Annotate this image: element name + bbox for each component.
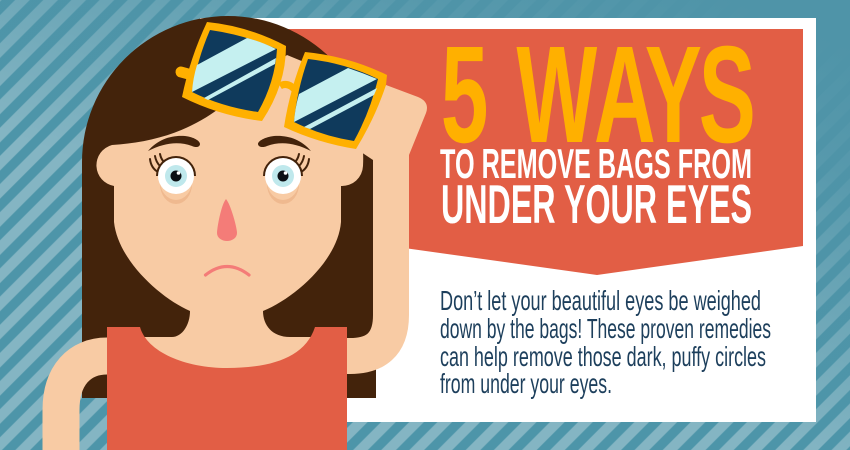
eyebrows — [148, 136, 311, 151]
left eye — [150, 154, 194, 194]
right lens — [294, 59, 378, 141]
character: woman lifting sunglasses — [61, 16, 427, 450]
sunglasses — [181, 22, 387, 149]
under-eye bags — [160, 162, 299, 204]
left arm — [61, 356, 120, 450]
intro paragraph — [440, 285, 771, 399]
mouth — [206, 266, 249, 275]
left lens glare — [192, 38, 276, 100]
bridge — [280, 84, 296, 91]
red tank top — [107, 327, 347, 450]
nose — [217, 199, 237, 241]
hair — [82, 16, 376, 398]
face and neck — [96, 55, 363, 372]
right frame — [284, 52, 387, 149]
title: 5 ways: 5 WAYS — [441, 18, 756, 172]
left lens — [192, 30, 277, 112]
right lens glare — [294, 68, 377, 129]
left frame — [182, 22, 286, 121]
right eye — [264, 154, 309, 194]
right arm and hand — [340, 85, 427, 356]
white panel — [200, 18, 816, 422]
red title banner — [250, 29, 803, 275]
intro paragraph: from under your eyes. — [440, 368, 612, 399]
temple knob — [181, 72, 192, 75]
